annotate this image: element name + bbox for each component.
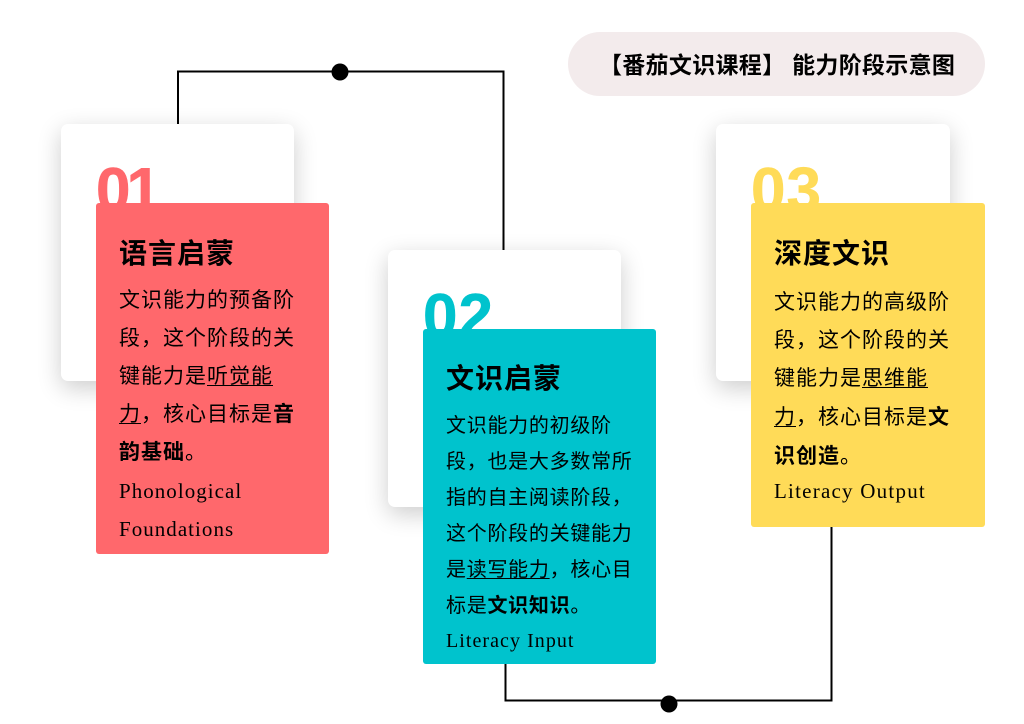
body text: stage 01: 段，这个阶段的关 xyxy=(119,327,295,350)
body text: stage 02: 标是文识知识。 xyxy=(446,595,591,617)
body text: stage 01: Foundations xyxy=(119,517,234,541)
body text: stage 02: 指的自主阅读阶段， xyxy=(446,487,632,509)
panel: stage 01 backing card xyxy=(61,124,294,381)
panel: stage 03 backing card xyxy=(716,124,950,381)
body text: stage 03: 段，这个阶段的关 xyxy=(774,329,950,352)
body text: stage 01: 韵基础。 xyxy=(119,441,207,464)
body text: stage 01: 键能力是听觉能 xyxy=(119,365,273,388)
panel: stage 03 deep literacy xyxy=(751,203,985,527)
body text: stage 01: 文识能力的预备阶 xyxy=(119,289,295,312)
title text: 【番茄文识课程】 能力阶段示意图 xyxy=(599,52,955,78)
heading: stage 02: 文识启蒙 xyxy=(446,363,562,394)
body text: stage 01: Phonological xyxy=(119,479,242,503)
panel: stage 02 literacy enlightenment xyxy=(423,329,656,664)
panel: stage 02 backing card xyxy=(388,250,621,507)
body text: stage 02: 段，也是大多数常所 xyxy=(446,451,632,473)
body text: stage 02: 是读写能力，核心目 xyxy=(446,559,633,581)
body text: stage 01: 力，核心目标是音 xyxy=(119,403,295,426)
heading: stage 01: 语言启蒙 xyxy=(119,238,235,269)
body text: stage 03 xyxy=(774,291,950,503)
body text: stage 03: Literacy Output xyxy=(774,479,926,503)
body text: stage 03: 识创造。 xyxy=(774,445,862,468)
body text: stage 02: 文识能力的初级阶 xyxy=(446,415,612,437)
panel: stage 01 language enlightenment xyxy=(96,203,329,554)
body text: stage 02 xyxy=(446,414,633,652)
body text: stage 03: 键能力是思维能 xyxy=(774,367,928,390)
body text: stage 02: Literacy Input xyxy=(446,630,575,652)
body text: stage 02: 这个阶段的关键能力 xyxy=(446,523,632,545)
heading: stage 03: 深度文识 xyxy=(774,238,890,269)
body text: stage 03: 文识能力的高级阶 xyxy=(774,291,950,314)
body text: stage 01 xyxy=(119,289,295,541)
body text: stage 03: 力，核心目标是文 xyxy=(774,406,950,429)
title pill xyxy=(568,32,985,96)
